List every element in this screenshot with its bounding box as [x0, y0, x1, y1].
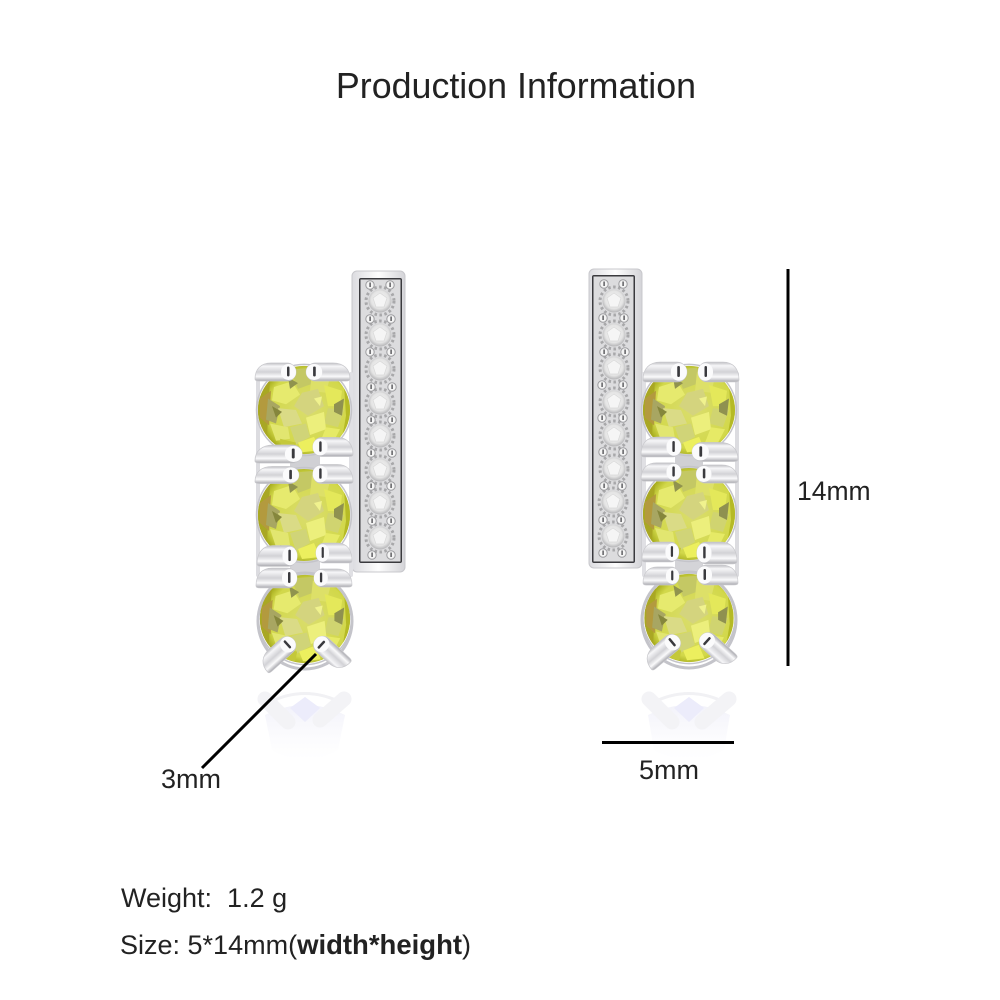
height dimension line — [786, 269, 790, 666]
title: Production Information — [336, 66, 696, 106]
peridot gem 3 — [258, 573, 352, 665]
left earring reflection — [265, 694, 345, 760]
peridot gem 5 — [642, 466, 736, 562]
peridot gem 4 — [642, 364, 736, 456]
peridot gem 2 — [256, 468, 352, 562]
right earring side rails — [642, 372, 739, 668]
left earring — [255, 271, 405, 760]
size specification: Size: 5*14mm(width*height) — [120, 929, 471, 960]
peridot gem 1 — [256, 364, 352, 456]
width dimension line — [602, 741, 734, 744]
label: 14mm: 14mm — [797, 476, 871, 506]
left earring pave bar — [352, 271, 405, 572]
weight specification: Weight: 1.2 g — [121, 883, 287, 913]
label: 5mm: 5mm — [639, 755, 699, 785]
left earring prongs — [255, 363, 353, 674]
right earring pave bar — [589, 269, 642, 568]
left earring side rails — [256, 372, 353, 669]
leader line: stone diameter — [202, 654, 316, 768]
peridot gem 6 — [643, 572, 735, 664]
right earring reflection — [648, 694, 730, 760]
right earring prongs — [641, 362, 739, 671]
label: 3mm: 3mm — [161, 764, 221, 794]
right earring — [589, 269, 739, 760]
